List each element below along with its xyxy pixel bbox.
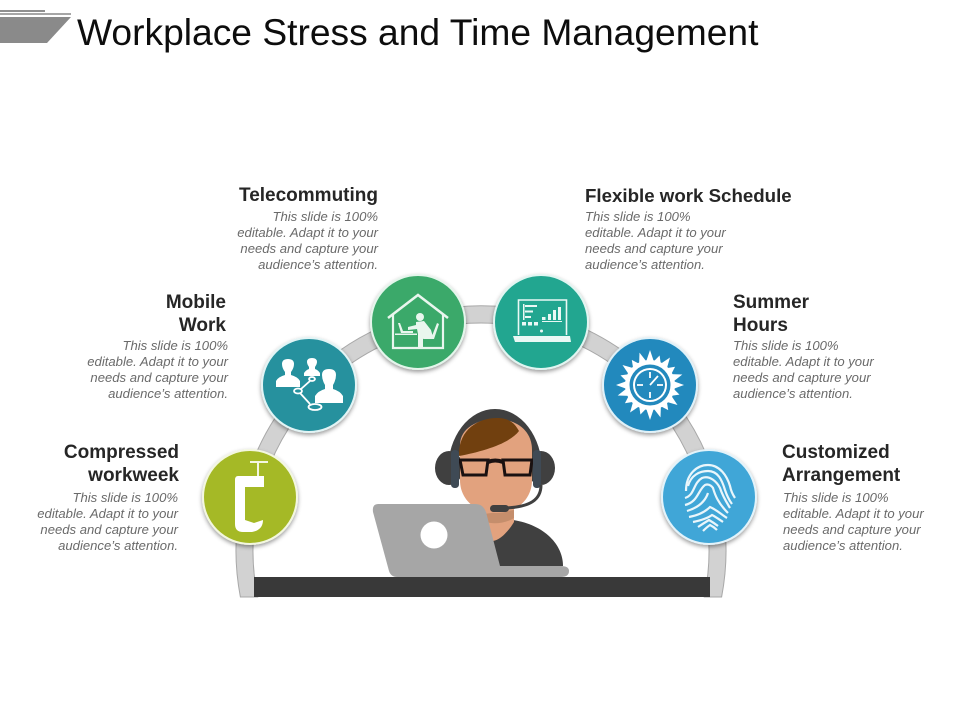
text block: Summer Hours: Hours xyxy=(733,315,788,336)
text block: Flexible work Schedule: audience’s attention. xyxy=(585,257,705,272)
face xyxy=(460,419,532,513)
left headset pad xyxy=(451,450,459,488)
person with headset xyxy=(373,409,569,577)
title: Workplace Stress and Time Management xyxy=(77,11,758,53)
text block: Summer Hours: This slide is 100% xyxy=(733,338,839,353)
icon: customized arrangement fingerprint xyxy=(662,450,756,544)
text block: Customized Arrangement: Arrangement xyxy=(782,465,900,486)
left ear cup xyxy=(435,451,463,485)
headband xyxy=(448,409,542,470)
icon: summer hours sun clock xyxy=(603,338,697,432)
text block: Compressed workweek: workweek xyxy=(88,465,179,486)
text block: Flexible work Schedule xyxy=(585,185,792,272)
text block: Flexible work Schedule: This slide is 100% xyxy=(585,209,691,224)
text block: Customized Arrangement xyxy=(782,442,924,553)
text block: Mobile Work: Work xyxy=(179,315,226,336)
text block: Customized Arrangement: Customized xyxy=(782,442,890,463)
torso xyxy=(470,520,563,566)
text block: Compressed workweek: editable. Adapt it to your xyxy=(37,506,178,521)
text block: Telecommuting: needs and capture your xyxy=(240,241,378,256)
text block: Telecommuting: editable. Adapt it to your xyxy=(237,225,378,240)
text block: Compressed workweek: Compressed xyxy=(64,442,179,463)
text block: Mobile Work: audience’s attention. xyxy=(108,386,228,401)
right headset pad xyxy=(533,450,541,488)
text block: Mobile Work: editable. Adapt it to your xyxy=(87,354,228,369)
text block: Compressed workweek: needs and capture your xyxy=(40,522,178,537)
text block: Summer Hours: Summer xyxy=(733,292,809,313)
text block: Telecommuting: Telecommuting xyxy=(239,185,378,206)
laptop xyxy=(373,504,569,577)
text block: Summer Hours: editable. Adapt it to your xyxy=(733,354,874,369)
text block: Mobile Work: needs and capture your xyxy=(90,370,228,385)
desk xyxy=(254,577,710,597)
text block: Mobile Work: This slide is 100% xyxy=(122,338,228,353)
icon: mobile work people xyxy=(262,338,356,432)
text block: Flexible work Schedule: needs and capture your xyxy=(585,241,723,256)
glasses xyxy=(460,460,532,475)
text block: Flexible work Schedule: Flexible work Schedule xyxy=(585,185,792,206)
header accent shape xyxy=(0,10,71,43)
text block: Customized Arrangement: This slide is 100% xyxy=(783,490,889,505)
right ear cup xyxy=(527,451,555,485)
text block: Customized Arrangement: audience’s attention. xyxy=(783,538,903,553)
arc band xyxy=(236,306,726,597)
text block: Summer Hours: needs and capture your xyxy=(733,370,871,385)
text block: Flexible work Schedule: editable. Adapt it to your xyxy=(585,225,726,240)
text block: Compressed workweek: This slide is 100% xyxy=(72,490,178,505)
icon: flexible schedule laptop chart xyxy=(494,275,588,369)
text block: Mobile Work: Mobile xyxy=(166,292,226,313)
neck shadow xyxy=(484,510,514,523)
text block: Summer Hours xyxy=(733,292,874,401)
text block: Compressed workweek: audience’s attention. xyxy=(58,538,178,553)
text block: Telecommuting xyxy=(237,185,378,272)
text block: Summer Hours: audience’s attention. xyxy=(733,386,853,401)
text block: Mobile Work xyxy=(87,292,228,401)
text block: Telecommuting: audience’s attention. xyxy=(258,257,378,272)
text block: Telecommuting: This slide is 100% xyxy=(272,209,378,224)
text block: Compressed workweek xyxy=(37,442,179,553)
microphone xyxy=(505,485,541,508)
icon: compressed workweek clamp xyxy=(203,450,297,544)
text block: Customized Arrangement: needs and capture your xyxy=(783,522,921,537)
neck xyxy=(486,500,514,541)
text block: Customized Arrangement: editable. Adapt it to your xyxy=(783,506,924,521)
hair xyxy=(459,418,519,456)
icon: telecommuting house xyxy=(371,275,465,369)
